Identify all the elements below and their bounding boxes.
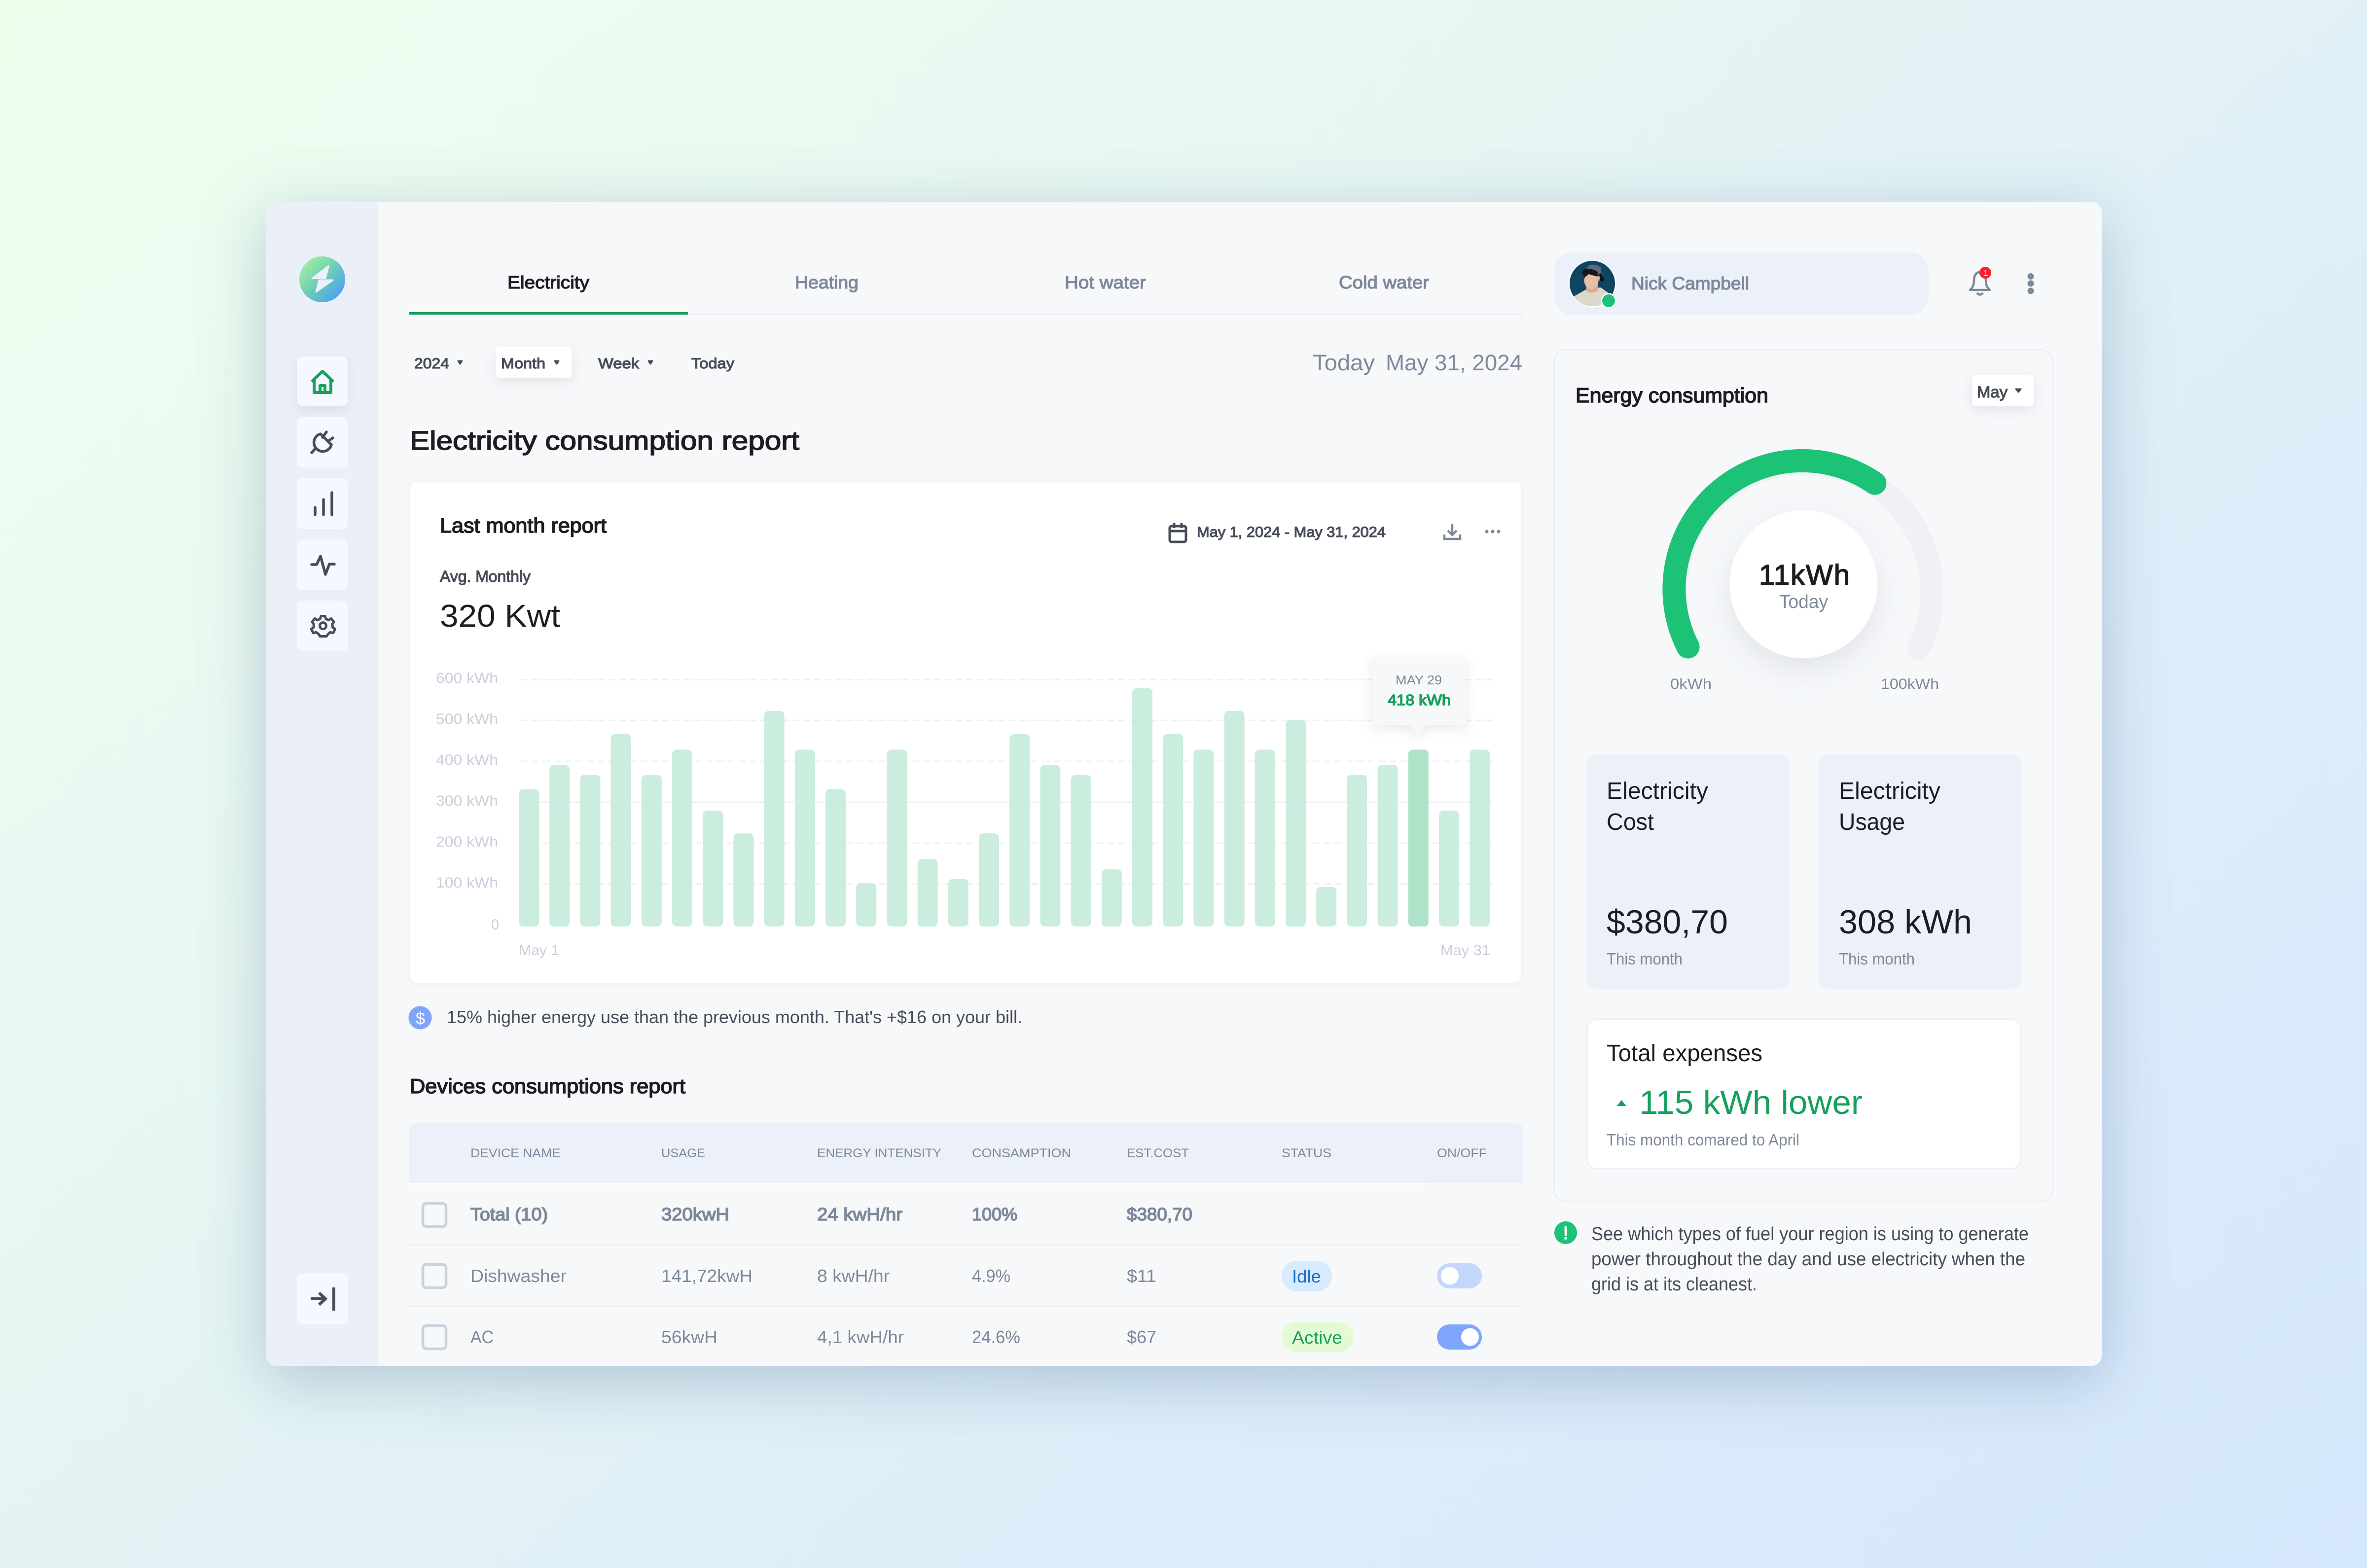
card: electricity usage: Electricity	[1839, 778, 1940, 804]
row: dishwasher: Dishwasher	[470, 1266, 567, 1286]
bar chart: 500 kWh	[436, 711, 498, 727]
icon: calendar	[1170, 523, 1186, 542]
panel: dashboard background	[266, 202, 2102, 1366]
month dropdown: May	[1977, 383, 2008, 401]
chart tooltip: 418 kWh	[1388, 691, 1451, 709]
card: electricity cost: This month	[1607, 950, 1683, 968]
bar chart: 100 kWh	[436, 875, 498, 891]
heading: Electricity consumption report: Electricity consumption report	[410, 426, 799, 456]
table header: STATUS	[1282, 1146, 1331, 1160]
card: total expenses: Total expenses	[1607, 1040, 1762, 1067]
row: AC: AC	[470, 1327, 494, 1347]
card: electricity usage: This month	[1839, 950, 1915, 968]
icon: bars button	[297, 478, 348, 529]
card: electricity cost: $380,70	[1607, 903, 1728, 941]
callout: fuel info: grid is at its cleanest.	[1591, 1274, 1757, 1295]
row: total: 24 kwH/hr	[817, 1204, 902, 1224]
icon: plug button	[297, 417, 348, 467]
period filters: Week	[598, 356, 640, 372]
table header	[409, 1123, 1523, 1184]
tabs: Electricity	[507, 272, 589, 292]
row: AC: Active	[1292, 1327, 1342, 1348]
bar chart: 400 kWh	[436, 752, 498, 768]
row: total: 320kwH	[661, 1204, 729, 1224]
callout: fuel info: See which types of fuel your region is using to generate	[1591, 1224, 2029, 1245]
heading: devices report: Devices consumptions report	[410, 1074, 685, 1098]
row: dishwasher: 8 kwH/hr	[817, 1266, 890, 1286]
icon: notification bell: 1	[1983, 269, 1988, 278]
chart tooltip: MAY 29	[1396, 673, 1442, 687]
panel: energy consumption	[1554, 350, 2052, 1201]
icon: download	[1444, 524, 1460, 539]
current date: Today	[1313, 350, 1375, 375]
card: electricity usage	[1818, 754, 2022, 989]
table header: EST.COST	[1127, 1146, 1189, 1160]
table header: USAGE	[661, 1146, 705, 1160]
icon: settings button	[297, 601, 348, 651]
period filters: 2024	[414, 356, 449, 372]
bar chart	[436, 657, 1493, 959]
card: total expenses	[1587, 1019, 2021, 1169]
callout: fuel info	[1554, 1221, 2029, 1295]
sidebar	[266, 202, 378, 1366]
table: devices	[409, 1123, 1523, 1353]
tabs: Hot water	[1065, 272, 1146, 292]
card: electricity usage: Usage	[1839, 809, 1905, 835]
date range: May 1, 2024 - May 31, 2024	[1197, 524, 1386, 540]
card: electricity cost: Electricity	[1607, 778, 1708, 804]
row: dishwasher: $11	[1127, 1266, 1156, 1286]
period filters: Month	[501, 356, 545, 372]
gauge	[1670, 461, 1939, 692]
row: total: $380,70	[1127, 1204, 1192, 1224]
gauge: 0kWh	[1670, 676, 1712, 692]
card: electricity cost	[1586, 754, 1790, 989]
bar chart: 0	[491, 917, 499, 933]
panel heading: Energy consumption	[1576, 384, 1768, 407]
callout: bill note: $	[416, 1009, 425, 1028]
row: dishwasher: 4.9%	[972, 1266, 1010, 1286]
row: total: 100%	[972, 1204, 1017, 1224]
icon: collapse arrow button	[297, 1274, 348, 1324]
row: AC	[423, 1322, 1482, 1353]
user profile pill	[1554, 252, 1929, 315]
gauge: Today	[1779, 592, 1828, 612]
callout: bill note: 15% higher energy use than the previous month. That's +$16 on your bill.	[447, 1007, 1022, 1027]
period filters	[414, 347, 734, 378]
icon: more dots	[1485, 530, 1500, 534]
panel: last month report card	[410, 482, 1521, 983]
tabs: Heating	[795, 272, 859, 292]
card: total expenses: 115 kWh lower	[1639, 1084, 1863, 1121]
row: AC: $67	[1127, 1327, 1156, 1347]
icon: pulse button	[297, 539, 348, 590]
user name: Nick Campbell	[1631, 273, 1749, 293]
card: electricity cost: Cost	[1607, 809, 1654, 835]
gauge: 11kWh	[1759, 559, 1850, 591]
bar chart: 600 kWh	[436, 670, 498, 686]
row: AC: 56kwH	[661, 1327, 717, 1347]
row: total	[423, 1203, 1192, 1227]
table header: DEVICE NAME	[470, 1146, 561, 1160]
chart tooltip	[1372, 657, 1466, 735]
month dropdown	[1972, 375, 2034, 406]
current date: May 31, 2024	[1386, 350, 1522, 375]
row: dishwasher: 141,72kwH	[661, 1266, 753, 1286]
row: dishwasher	[423, 1261, 1482, 1291]
row: dishwasher: Idle	[1292, 1266, 1321, 1286]
callout: fuel info: !	[1563, 1223, 1568, 1243]
period filters: Today	[691, 356, 734, 372]
bar chart: 300 kWh	[436, 793, 498, 809]
tabs	[409, 272, 1523, 315]
bar chart: May 31	[1440, 942, 1490, 959]
average value: 320 Kwt	[440, 598, 560, 634]
table header: CONSAMPTION	[972, 1146, 1071, 1160]
callout: fuel info: power throughout the day and use electricity when the	[1591, 1249, 2025, 1270]
table header: ON/OFF	[1437, 1146, 1487, 1160]
card: total expenses: This month comared to April	[1607, 1131, 1799, 1149]
tabs: Cold water	[1339, 272, 1429, 292]
icon: logo	[299, 256, 345, 302]
bar chart: 200 kWh	[436, 834, 498, 850]
icon: notification bell	[1970, 267, 1991, 295]
icon: kebab menu	[2028, 273, 2034, 294]
icon: home button	[297, 356, 348, 406]
avatar	[1568, 259, 1616, 309]
row: AC: 4,1 kwH/hr	[817, 1327, 904, 1347]
card title: Last month report	[440, 514, 607, 537]
average label: Avg. Monthly	[440, 568, 531, 585]
current date	[1313, 350, 1522, 375]
row: AC: 24.6%	[972, 1327, 1020, 1347]
table header: ENERGY INTENSITY	[817, 1146, 941, 1160]
bar chart: May 1	[519, 942, 559, 959]
card: electricity usage: 308 kWh	[1839, 903, 1972, 941]
gauge: 100kWh	[1881, 676, 1939, 692]
row: total: Total (10)	[470, 1204, 548, 1224]
